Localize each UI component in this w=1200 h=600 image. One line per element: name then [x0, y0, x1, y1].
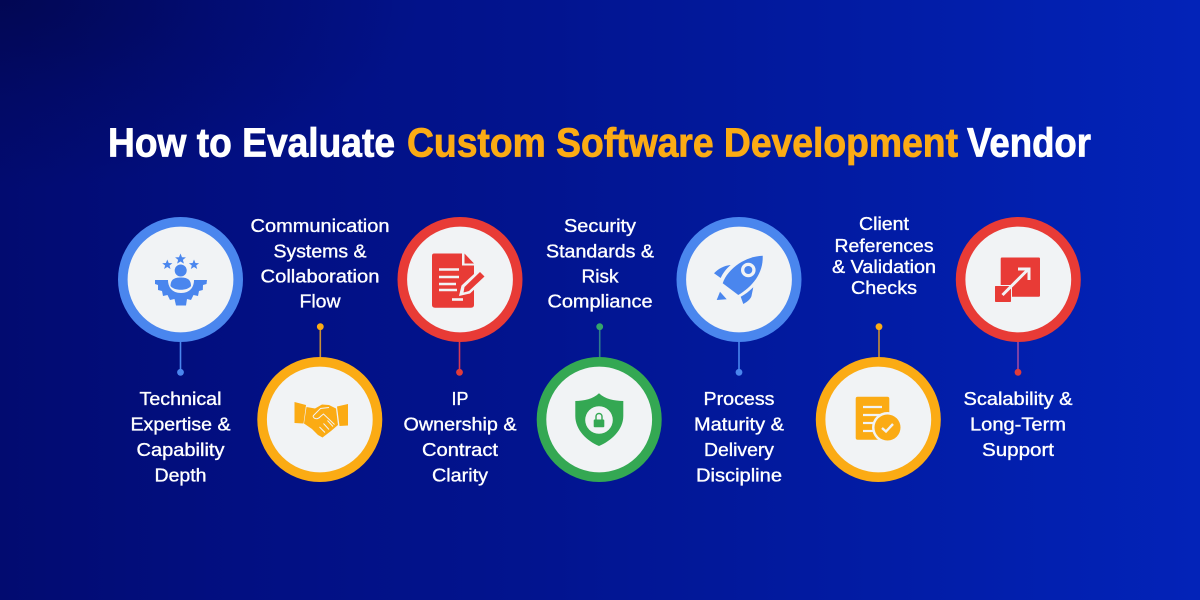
item: security standards: [542, 215, 657, 477]
label: Compliance: [548, 290, 652, 312]
label: [546, 215, 655, 312]
badge circle: [681, 222, 797, 337]
connector: [876, 323, 882, 359]
label: Expertise &: [130, 414, 231, 434]
icon: scale up arrow: [994, 258, 1040, 302]
label: Contract: [422, 439, 498, 460]
icon: shield and lock: [575, 393, 623, 446]
connector: [736, 340, 742, 376]
label: Flow: [300, 290, 341, 312]
label: Checks: [851, 277, 917, 298]
label: Delivery: [704, 439, 775, 460]
item: technical expertise: [123, 222, 238, 486]
connector: [596, 323, 603, 359]
label: [130, 388, 231, 486]
label: Scalability &: [964, 388, 1073, 409]
label: Depth: [154, 464, 206, 486]
badge circle: [123, 222, 238, 337]
label: Standards &: [546, 240, 655, 262]
label: [964, 388, 1073, 460]
label: IP: [452, 388, 468, 409]
label: Client: [859, 213, 909, 234]
item: client references: [821, 213, 936, 477]
label: Ownership &: [404, 414, 517, 434]
badge circle: [402, 222, 518, 337]
label: Communication: [250, 215, 390, 236]
label: Discipline: [696, 464, 782, 486]
label: [832, 213, 936, 298]
badge circle: [961, 222, 1076, 337]
label: [250, 215, 390, 312]
title: How to Evaluate: [108, 120, 395, 166]
badge circle: [542, 362, 657, 477]
title: Custom Software Development: [407, 120, 958, 166]
connector: [177, 340, 184, 376]
title: Vendor: [967, 120, 1091, 166]
badge circle: [821, 362, 936, 477]
item: scalability: [961, 222, 1076, 460]
connector: [317, 323, 324, 359]
item: communication systems: [250, 215, 390, 477]
label: References: [834, 235, 934, 256]
label: Collaboration: [260, 266, 380, 286]
label: Capability: [136, 439, 225, 460]
item: process maturity: [681, 222, 797, 486]
title: [108, 120, 1091, 166]
item: ip ownership: [402, 222, 518, 486]
label: Systems &: [274, 240, 367, 262]
icon: handshake: [294, 402, 348, 438]
label: Long-Term: [970, 414, 1066, 434]
label: Clarity: [432, 464, 489, 486]
icon: team gear and stars: [155, 254, 207, 306]
label: [404, 388, 517, 486]
label: & Validation: [832, 256, 936, 277]
connector: [1015, 340, 1021, 376]
icon: document with check: [856, 397, 903, 443]
badge circle: [262, 362, 377, 477]
label: Risk: [582, 266, 619, 286]
label: Security: [564, 215, 637, 236]
icon: contract and pen: [432, 254, 488, 308]
label: Maturity &: [694, 414, 785, 434]
connector: [456, 340, 463, 376]
label: Process: [704, 388, 774, 409]
label: Technical: [140, 388, 222, 409]
label: [694, 388, 785, 486]
icon: rocket: [714, 256, 763, 304]
label: Support: [982, 439, 1054, 460]
